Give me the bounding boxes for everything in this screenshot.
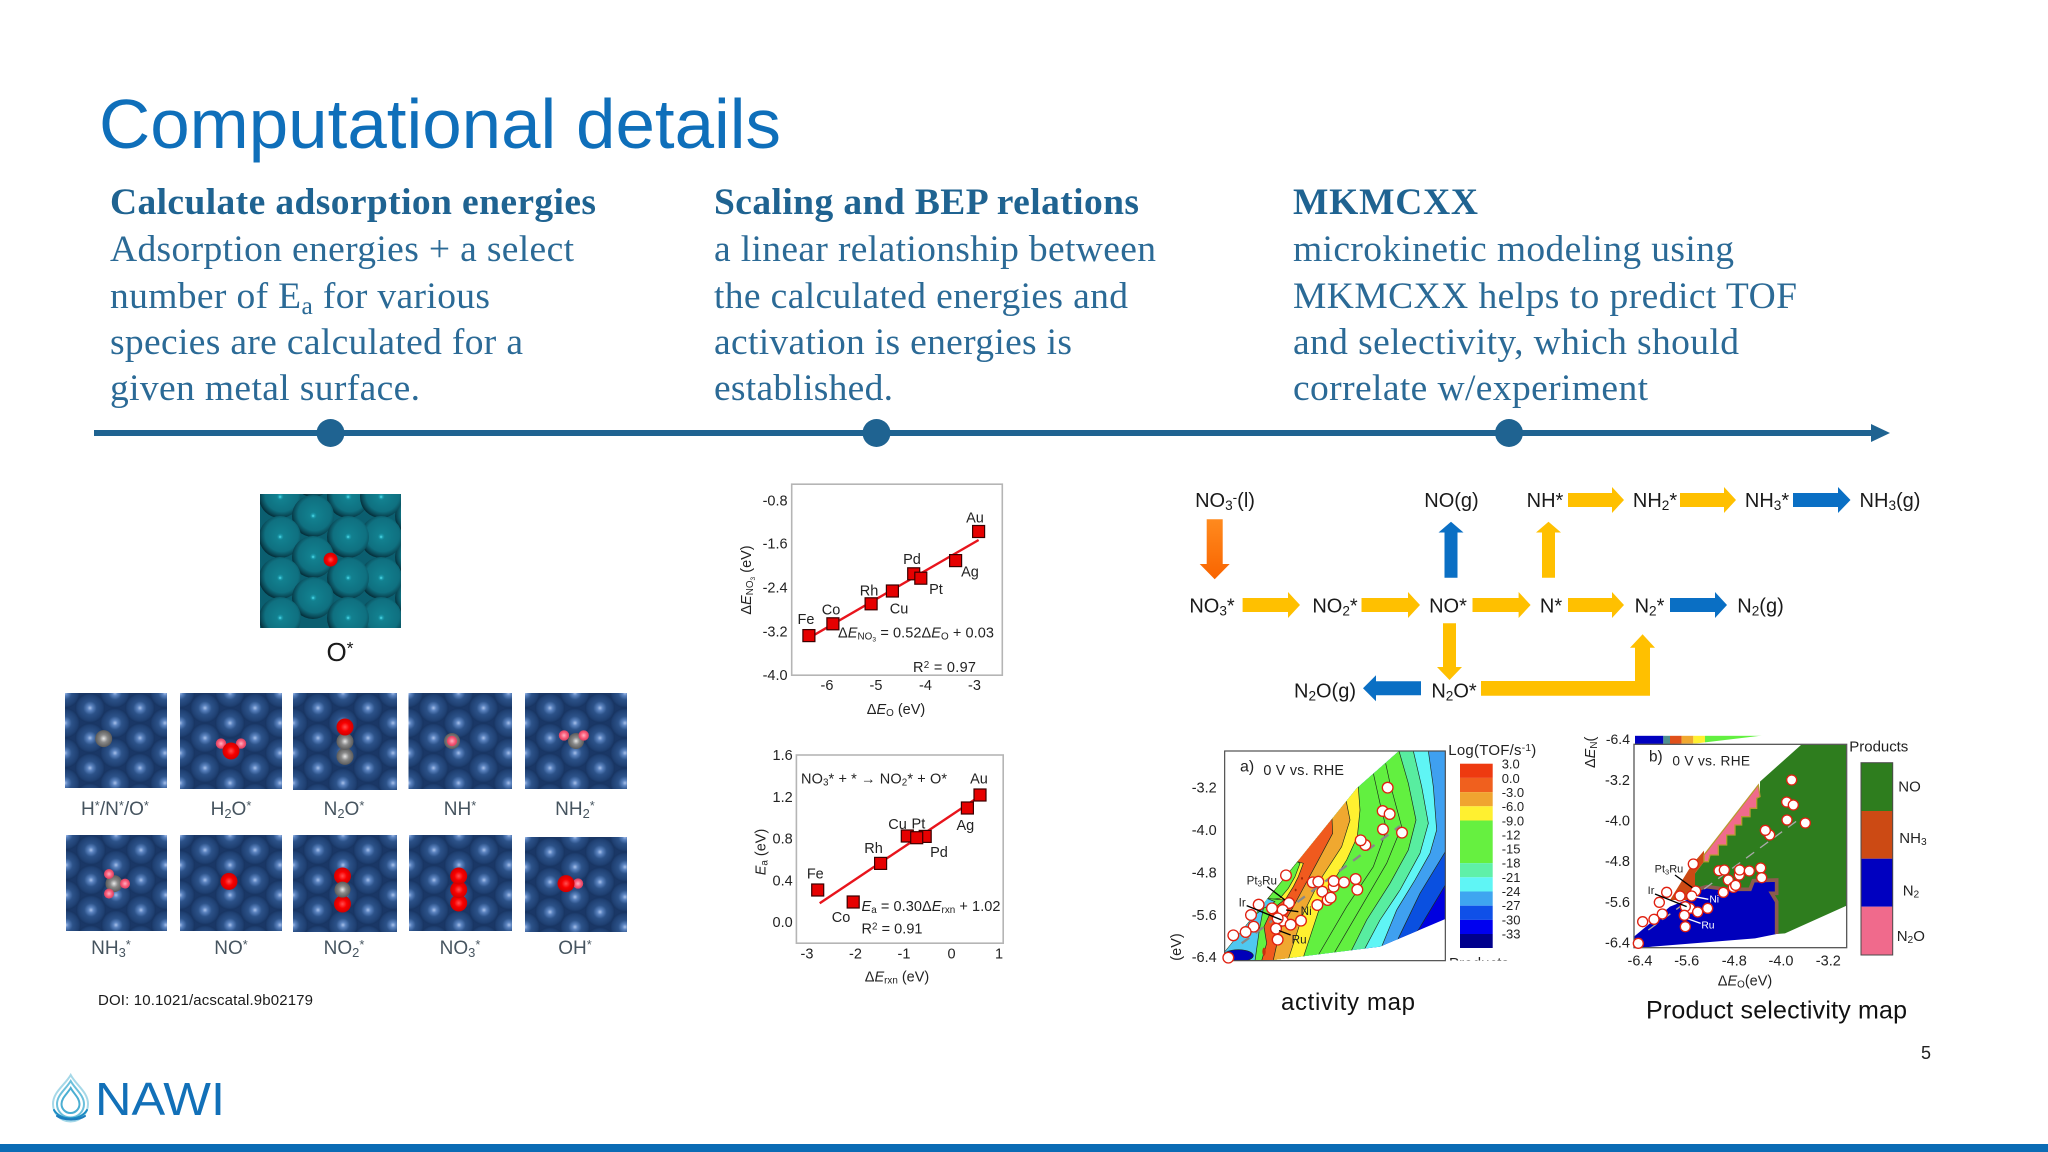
chart: BEP relation: Cu	[888, 817, 907, 833]
contour bands	[1225, 752, 1445, 960]
species labels: NO(g)	[1424, 490, 1479, 512]
products legend: N2O	[1897, 928, 1925, 946]
NAWI logo: NAWI	[95, 1073, 225, 1125]
species labels: NO3*	[1189, 596, 1235, 619]
adsorbate tile: NO3*: NO3*	[440, 937, 480, 960]
colour bar legend: Products	[1449, 955, 1509, 972]
chart: BEP relation: NO3* + * → NO2* + O*	[801, 772, 947, 789]
chart: BEP relation: Ea = 0.30ΔErxn + 1.02	[862, 899, 1000, 916]
adsorbate tile: NH3*: NH3*	[91, 937, 131, 960]
species labels: NH3*	[1745, 490, 1789, 513]
O* teal surface image	[260, 494, 401, 628]
chart: scaling relation: -2.4	[763, 581, 788, 597]
chart: scaling relation: Co	[822, 603, 840, 619]
DOI reference: DOI: 10.1021/acscatal.9b02179	[98, 992, 313, 1009]
arrow: NO2* to NO*	[1362, 592, 1420, 618]
adsorbate tile: OH*: OH*	[558, 937, 592, 959]
chart: scaling relation: ΔEO (eV)	[867, 702, 925, 719]
colour bar legend: -6.0	[1502, 799, 1524, 814]
chart: scaling relation: Au	[966, 510, 984, 526]
axis ticks and labels: -6.4	[1605, 936, 1630, 952]
activity map: Ni	[1301, 905, 1312, 918]
data points	[1633, 775, 1810, 948]
arrow: N2* to N2(g)	[1670, 592, 1727, 618]
axis ticks and labels: -4.8	[1722, 954, 1747, 970]
adsorbate tile: N2O*	[293, 693, 397, 821]
text block: calculate adsorption energies: Adsorption energies + a select	[110, 229, 575, 270]
N2O region	[1704, 785, 1760, 862]
arrow: N2O* to N2O(g)	[1363, 675, 1421, 701]
frame	[1634, 744, 1847, 948]
adsorbate tile: H2O*: H2O*	[211, 798, 251, 821]
chart: scaling relation: Pd	[903, 552, 921, 568]
colour bar legend: -27	[1502, 898, 1520, 913]
colour bar legend: Log(TOF/s-1)	[1448, 742, 1536, 759]
arrow: NO3* to NO2*	[1243, 592, 1300, 618]
arrow: NH2* to NH3*	[1680, 487, 1736, 513]
product selectivity map: b)	[1649, 749, 1663, 766]
activity map: Pt3Ru	[1247, 874, 1277, 888]
text block: scaling and BEP relations: Scaling and BEP relations	[714, 182, 1139, 223]
title: Computational details	[99, 85, 781, 163]
adsorbate tile: NO*	[180, 835, 282, 959]
adsorbate tile: N2O*: N2O*	[324, 798, 364, 821]
species labels: N2O(g)	[1294, 681, 1356, 704]
product selectivity map: -6.4	[1606, 731, 1630, 747]
chart: scaling relation: Fe	[798, 612, 814, 628]
text block: calculate adsorption energies	[110, 182, 596, 409]
chart: BEP relation: Pt	[912, 816, 925, 832]
axis ticks and labels: ΔEN(	[1583, 737, 1600, 768]
colour bar legend: 0.0	[1502, 771, 1520, 786]
y axis ticks: -3.2	[1192, 781, 1217, 797]
y axis ticks: -6.4	[1192, 950, 1217, 966]
species labels: NH2*	[1633, 490, 1677, 513]
chart: BEP relation: Ag	[957, 818, 974, 834]
arrow: N* to N2*	[1568, 592, 1624, 618]
adsorbate tile: NH*: NH*	[444, 798, 476, 820]
product selectivity map: Pt3Ru	[1655, 864, 1683, 876]
text block: MKMCXX: and selectivity, which should	[1293, 322, 1739, 363]
products legend	[1849, 739, 1927, 955]
chart: BEP relation: R2 = 0.91	[862, 922, 922, 938]
text block: scaling and BEP relations: a linear relationship between	[714, 229, 1156, 270]
species labels: N2O*	[1431, 681, 1477, 704]
arrow: NH* to NH2*	[1568, 487, 1624, 513]
chart: scaling relation: ΔENO3 (eV)	[739, 545, 757, 615]
chart: BEP relation: 1.2	[773, 790, 793, 806]
NO region	[1695, 744, 1847, 934]
chart: scaling relation: -4.0	[763, 668, 788, 684]
y axis ticks	[1169, 781, 1217, 966]
chart: BEP relation: Rh	[864, 841, 883, 857]
y axis ticks: -4.8	[1192, 865, 1217, 881]
chart: scaling relation: -4	[919, 678, 932, 694]
species labels: NH*	[1527, 490, 1564, 512]
arrow: NH3* to NH3(g)	[1793, 487, 1850, 513]
colour bar legend: -30	[1502, 912, 1520, 928]
alloy pointers	[1655, 875, 1708, 923]
activity map: Ru	[1292, 933, 1307, 946]
colour bar legend: -3.0	[1502, 785, 1524, 800]
frame	[1225, 751, 1445, 961]
reaction network diagram	[1189, 487, 1920, 704]
axis ticks and labels: -4.8	[1605, 854, 1630, 870]
chart: BEP relation: -2	[849, 946, 862, 962]
text block: scaling and BEP relations	[714, 182, 1156, 409]
colour bar legend: -18	[1502, 856, 1520, 870]
adsorbate tile: H*/N*/O*: H*/N*/O*	[81, 798, 149, 820]
text block: MKMCXX: MKMCXX helps to predict TOF	[1293, 276, 1797, 317]
alloy pointers	[1247, 887, 1298, 935]
label: O*: O*	[326, 637, 354, 667]
chart: BEP relation: 0.0	[773, 915, 793, 931]
axis ticks and labels: -5.6	[1674, 954, 1699, 970]
chart: scaling relation: ΔENO3 = 0.52ΔEO + 0.03	[838, 625, 994, 643]
chart: BEP relation: 0.8	[773, 831, 793, 847]
adsorbate tile: NO*: NO*	[214, 937, 248, 959]
text block: calculate adsorption energies: species are calculated for a	[110, 322, 523, 363]
species labels: N2*	[1635, 596, 1665, 619]
colour bar legend: -12	[1502, 828, 1520, 842]
boundary between N2 and NO	[1695, 880, 1777, 934]
chart: scaling relation: Rh	[860, 584, 878, 600]
product selectivity map	[1583, 731, 1927, 991]
colour bar legend	[1448, 742, 1536, 972]
fragment of cropped upper map	[1635, 736, 1762, 744]
y axis ticks: (eV)	[1169, 933, 1185, 961]
colour bar legend: -9.0	[1502, 814, 1524, 828]
adsorbate tile: NH*	[408, 693, 512, 820]
chart: BEP relation: -1	[898, 946, 910, 962]
text block: MKMCXX: MKMCXX	[1293, 182, 1478, 223]
colour bar legend: -15	[1502, 842, 1520, 856]
dashed trend line	[1242, 826, 1400, 943]
timeline arrow	[94, 419, 1890, 447]
arrow: N* up to NH*	[1536, 522, 1561, 578]
chart: scaling relation: -3	[968, 678, 981, 694]
text block: scaling and BEP relations: the calculated energies and	[714, 276, 1128, 317]
chart: scaling relation: -3.2	[763, 625, 788, 641]
chart: scaling relation: -0.8	[763, 493, 788, 509]
dashed trend line	[1648, 817, 1802, 930]
adsorbate tile: NO2*: NO2*	[324, 937, 364, 960]
N2 region	[1634, 880, 1777, 948]
species labels	[1189, 490, 1920, 704]
chart: scaling relation: -1.6	[763, 537, 788, 553]
colour bar legend: 3.0	[1502, 756, 1520, 772]
arrow: NO* down to N2O*	[1437, 623, 1462, 680]
adsorbate tile: H2O*	[180, 693, 282, 821]
products legend: Products	[1849, 739, 1908, 756]
product selectivity map: Ir	[1648, 885, 1655, 897]
axis ticks and labels	[1583, 737, 1841, 991]
product selectivity map: Ru	[1701, 920, 1715, 931]
page number: 5	[1921, 1043, 1931, 1063]
chart: BEP relation: Pd	[930, 845, 948, 861]
species labels: N2(g)	[1737, 596, 1784, 619]
products legend: N2	[1903, 883, 1920, 901]
axis ticks and labels: -3.2	[1816, 954, 1841, 970]
y axis ticks: -5.6	[1192, 908, 1217, 924]
text block: MKMCXX: microkinetic modeling using	[1293, 229, 1734, 270]
chart: BEP relation	[754, 748, 1003, 987]
chart: BEP relation: 1	[995, 946, 1003, 962]
text block: calculate adsorption energies: number of Ea for various	[110, 276, 490, 320]
adsorbate tile: NH2*: NH2*	[555, 798, 595, 821]
chart: BEP relation: 0	[947, 946, 956, 962]
activity map: Ir	[1239, 897, 1246, 910]
arrow: NO* up to NO(g)	[1438, 522, 1464, 578]
y axis ticks: -4.0	[1192, 823, 1217, 839]
arrow: NO3-(l) down to NO3*	[1200, 519, 1230, 579]
adsorbate tile: OH*	[525, 837, 627, 959]
axis ticks and labels: -5.6	[1605, 895, 1630, 911]
text block: scaling and BEP relations: activation is energies is	[714, 322, 1072, 363]
footer bar	[0, 1144, 2048, 1152]
chart: scaling relation: -6	[821, 678, 833, 694]
species labels: N*	[1540, 596, 1562, 618]
chart: scaling relation	[739, 484, 1002, 719]
caption: activity map: activity map	[1281, 989, 1415, 1016]
activity map: a)	[1240, 759, 1254, 776]
text block: MKMCXX	[1293, 182, 1797, 409]
axis ticks and labels: -3.2	[1605, 773, 1630, 789]
colour bar legend: -21	[1502, 870, 1520, 885]
text block: calculate adsorption energies: given metal surface.	[110, 368, 420, 409]
products legend: NO	[1898, 779, 1921, 796]
chart: BEP relation: 0.4	[773, 874, 793, 890]
chart: BEP relation: -3	[801, 946, 813, 962]
chart: scaling relation: Cu	[890, 602, 908, 618]
axis ticks and labels: -6.4	[1628, 954, 1652, 970]
colour bar legend: -33	[1502, 926, 1520, 942]
chart: scaling relation: R2 = 0.97	[913, 660, 976, 676]
arrow: N2O* elbow to N2*	[1481, 634, 1655, 696]
text block: scaling and BEP relations: established.	[714, 368, 893, 409]
adsorbate tile: NO3*	[409, 835, 512, 960]
NAWI logo	[53, 1073, 225, 1125]
adsorbate tile: NH3*	[66, 835, 167, 960]
colour bar legend: -24	[1502, 884, 1520, 899]
species labels: NO*	[1429, 596, 1467, 618]
axis ticks and labels: -4.0	[1605, 814, 1630, 830]
product selectivity map: Ni	[1709, 895, 1719, 906]
activity map	[1169, 742, 1536, 972]
data points	[1223, 782, 1407, 963]
chart: scaling relation: Ag	[961, 564, 979, 580]
activity map: 0 V vs. RHE	[1263, 763, 1344, 779]
chart: scaling relation: -5	[870, 678, 882, 694]
NH3 region	[1670, 851, 1704, 900]
species labels: NH3(g)	[1860, 490, 1920, 513]
adsorbate tile: NH2*	[525, 693, 627, 821]
axis ticks and labels: ΔEO(eV)	[1718, 974, 1772, 991]
text block: calculate adsorption energies: Calculate adsorption energies	[110, 182, 596, 223]
chart: BEP relation: Co	[832, 910, 850, 926]
chart: BEP relation: ΔErxn (eV)	[865, 969, 929, 987]
chart: BEP relation: Au	[970, 771, 988, 787]
chart: scaling relation: Pt	[929, 582, 943, 598]
products legend: NH3	[1899, 830, 1927, 848]
caption: product selectivity map: Product selectivity map	[1646, 996, 1907, 1024]
axis ticks and labels: -4.0	[1768, 954, 1794, 970]
chart: BEP relation: 1.6	[773, 748, 793, 764]
chart: BEP relation: Fe	[807, 866, 824, 882]
product selectivity map: 0 V vs. RHE	[1672, 754, 1750, 769]
arrow: NO* to N*	[1472, 592, 1531, 618]
adsorbate tile: NO2*	[293, 835, 397, 960]
adsorbate tile: H*/N*/O*	[65, 693, 167, 820]
text block: MKMCXX: correlate w/experiment	[1293, 368, 1649, 409]
chart: BEP relation: Ea (eV)	[754, 829, 771, 875]
species labels: NO3-(l)	[1195, 490, 1255, 513]
species labels: NO2*	[1312, 596, 1358, 619]
